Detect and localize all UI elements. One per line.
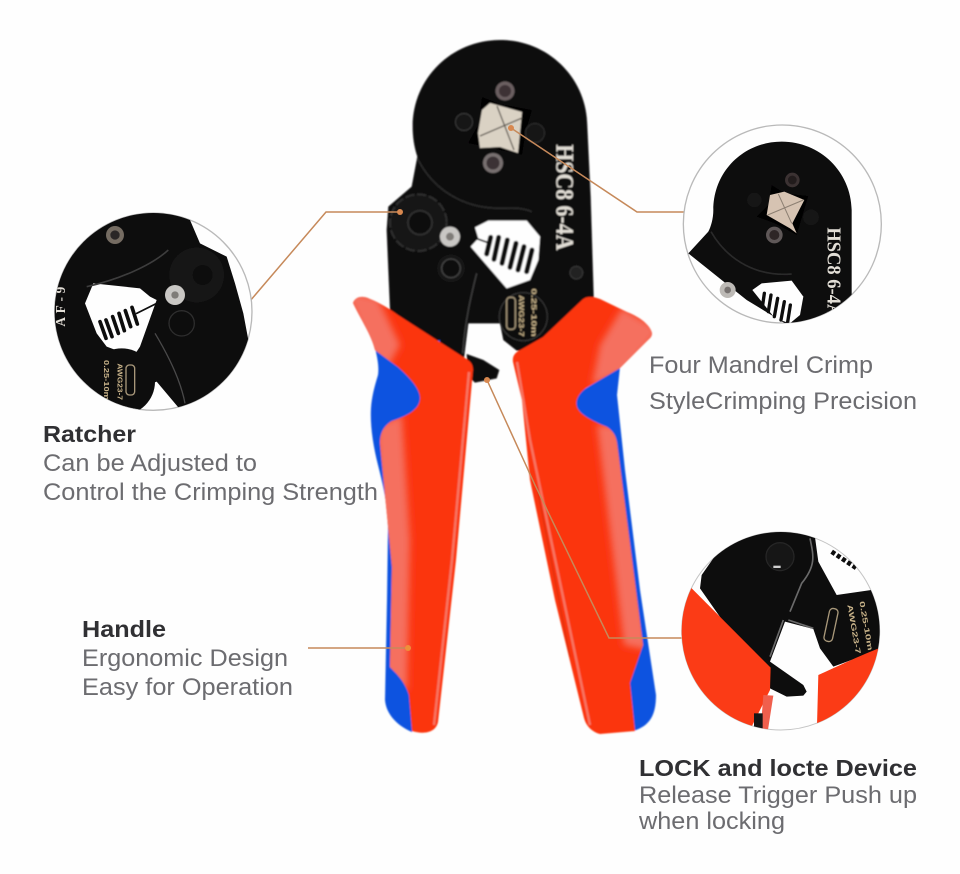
lever markings [823, 608, 839, 642]
callout line: ratchet [250, 209, 403, 301]
text block: Four Mandrel Crimp [649, 352, 917, 415]
ratchet wheel [390, 194, 447, 251]
model marking HSC8 6-4A: HSC8 6-4A [551, 144, 579, 251]
text block: LOCK device: when locking [638, 808, 785, 835]
text block: Ratcher [43, 421, 378, 506]
callout line: handle [308, 645, 411, 651]
inset circle: ratchet [54, 212, 253, 411]
white window with spring [471, 221, 540, 288]
inset circle: ratchet: 0.25-10m [102, 360, 111, 401]
inset circle: ratchet: AF-9 [53, 286, 68, 327]
tool head and black metal body [387, 40, 594, 383]
crimp die with screws [456, 82, 544, 173]
text block: LOCK device: LOCK and locte Device [639, 755, 917, 781]
right handle [513, 297, 660, 734]
red handles [682, 588, 771, 726]
callout line: lock [484, 377, 682, 638]
release catch [467, 354, 499, 383]
main product photo: crimping tool [345, 40, 660, 734]
text block: Handle: Easy for Operation [82, 674, 293, 701]
lower lobe with size markings [499, 293, 547, 341]
inset circle: lock device: 0.25-10m [857, 600, 875, 652]
inset circle: ratchet: AWG23-7 [115, 363, 124, 400]
callout line: crimp die [508, 125, 686, 212]
inset circle: four mandrel die: HSC8 6-4A [823, 227, 845, 318]
text block: Four Mandrel Crimp: Four Mandrel Crimp [649, 352, 873, 379]
head seam [417, 158, 532, 212]
spring [462, 233, 532, 272]
pivot screw [440, 227, 460, 247]
text block: Handle: Handle [82, 616, 166, 642]
pivot arm line [463, 273, 477, 353]
text block: LOCK device: Release Trigger Push up [639, 782, 917, 809]
text block: Handle [82, 616, 293, 701]
left handle [345, 290, 473, 733]
text block: Four Mandrel Crimp: StyleCrimping Precision [649, 388, 917, 415]
text block: LOCK device [638, 755, 917, 835]
text block: Ratcher: Can be Adjusted to [43, 450, 257, 477]
inset circle: lock device [681, 532, 880, 730]
text block: Ratcher: Control the Crimping Strength [43, 479, 378, 506]
tool head and black metal body: AWG23-7 [517, 295, 526, 337]
text block: Handle: Ergonomic Design [82, 645, 288, 672]
die [757, 185, 808, 235]
inset circle: four mandrel die [683, 125, 881, 333]
text block: Ratcher: Ratcher [43, 421, 136, 447]
inset circle: lock device: AWG23-7 [845, 604, 863, 655]
window and spring [752, 281, 803, 323]
window and spring [85, 283, 157, 357]
tool head and black metal body: 0.25-10m [530, 288, 539, 337]
